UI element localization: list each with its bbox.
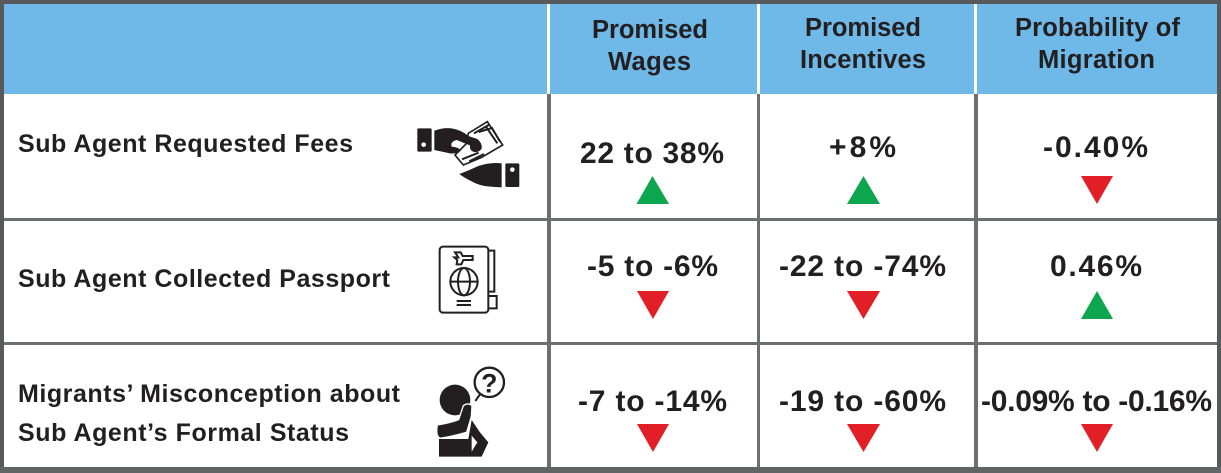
heading: Probability of Migration (1015, 14, 1180, 74)
values: requested fees, promised incentives: +8% (829, 131, 896, 164)
values: requested fees, promised wages (580, 137, 724, 204)
heading: Promised Wages (592, 16, 708, 76)
icon: person with question bubble (437, 368, 504, 457)
icon: person with question bubble: ? (481, 368, 497, 398)
values: requested fees, probability of migration (1043, 131, 1148, 204)
heading: Probability of Migration: Probability of (1015, 14, 1180, 42)
heading: Promised Wages: Wages (608, 48, 691, 76)
row label: Migrants' Misconception about Sub Agent's Formal Status: Migrants’ Misconception about (18, 380, 401, 408)
values: misconception, promised incentives (779, 385, 946, 452)
values: collected passport, promised incentives (779, 250, 946, 319)
values: collected passport, probability of migration (1050, 250, 1142, 319)
icon: hands exchanging money (417, 122, 519, 187)
values: misconception, promised wages: -7 to -14% (578, 385, 727, 418)
values: misconception, probability of migration (981, 385, 1212, 452)
values: misconception, promised wages (578, 385, 727, 452)
heading: Promised Incentives: Incentives (800, 46, 926, 74)
heading: Promised Wages: Promised (592, 16, 708, 44)
row label: Sub Agent Requested Fees: Sub Agent Requested Fees (18, 130, 353, 158)
header band (3, 3, 1218, 94)
values: misconception, probability of migration: -0.09% to -0.16% (981, 385, 1212, 418)
icon: passport (440, 247, 497, 313)
heading: Promised Incentives (800, 14, 926, 74)
values: collected passport, promised incentives: -22 to -74% (779, 250, 946, 283)
heading: Promised Incentives: Promised (805, 14, 921, 42)
values: collected passport, probability of migration: 0.46% (1050, 250, 1142, 283)
row label: Migrants' Misconception about Sub Agent's Formal Status (18, 380, 401, 447)
values: collected passport, promised wages: -5 to -6% (587, 250, 718, 283)
values: requested fees, promised wages: 22 to 38% (580, 137, 724, 170)
heading: Probability of Migration: Migration (1038, 46, 1155, 74)
values: misconception, promised incentives: -19 to -60% (779, 385, 946, 418)
values: requested fees, probability of migration: -0.40% (1043, 131, 1148, 164)
row label: Migrants' Misconception about Sub Agent's Formal Status: Sub Agent’s Formal Status (18, 419, 349, 447)
values: requested fees, promised incentives (829, 131, 896, 204)
values: collected passport, promised wages (587, 250, 718, 319)
row label: Sub Agent Collected Passport: Sub Agent Collected Passport (18, 265, 391, 293)
